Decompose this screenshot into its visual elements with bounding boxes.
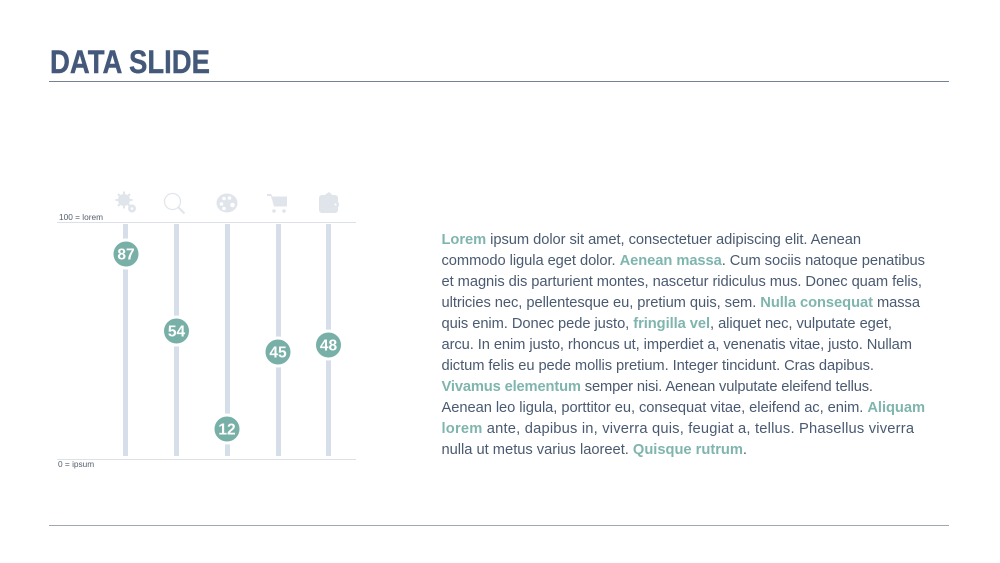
slider: 87: 87 xyxy=(117,246,135,264)
slider: 45: 45 xyxy=(269,344,287,362)
body text: ultricies nec, pellentesque eu, pretium quis, sem. Nulla consequat massa xyxy=(442,295,921,311)
body text: Lorem ipsum dolor sit amet, consectetuer adipiscing elit. Aenean xyxy=(442,232,861,248)
body text: lorem ante, dapibus in, viverra quis, feugiat a, tellus. Phasellus viverra xyxy=(442,421,915,437)
body text: commodo ligula eget dolor. Aenean massa. Cum sociis natoque penatibus xyxy=(442,253,925,269)
body text: dictum felis eu pede mollis pretium. Integer tincidunt. Cras dapibus. xyxy=(442,358,874,374)
slider: 48 xyxy=(314,224,342,456)
title: DATA SLIDE xyxy=(50,44,210,80)
icon: palette xyxy=(216,194,238,212)
body text xyxy=(442,232,925,458)
slider: 87 xyxy=(112,224,140,456)
slider: 12 xyxy=(213,224,241,456)
slider: 54 xyxy=(162,224,190,456)
axis label: top: 100 = lorem xyxy=(59,212,103,222)
axis label: bottom: 0 = ipsum xyxy=(58,459,94,469)
icon: gears xyxy=(116,192,136,212)
body text: et magnis dis parturient montes, nascetur ridiculus mus. Donec quam felis, xyxy=(442,274,922,290)
chart: slider values xyxy=(57,192,356,469)
slider: 12: 12 xyxy=(218,422,236,438)
body text: quis enim. Donec pede justo, fringilla vel, aliquet nec, vulputate eget, xyxy=(442,316,892,332)
body text: Aenean leo ligula, porttitor eu, consequat vitae, eleifend ac, enim. Aliquam xyxy=(442,400,925,416)
icon: magnifier xyxy=(164,194,184,214)
slider: 48: 48 xyxy=(320,338,337,354)
body text: arcu. In enim justo, rhoncus ut, imperdiet a, venenatis vitae, justo. Nullam xyxy=(442,337,912,353)
slider: 54: 54 xyxy=(168,324,185,340)
icon: wallet xyxy=(319,192,339,213)
body text: Vivamus elementum semper nisi. Aenean vulputate eleifend tellus. xyxy=(442,379,873,395)
slider: 45 xyxy=(264,224,292,456)
icon: shopping cart xyxy=(267,194,287,213)
body text: nulla ut metus varius laoreet. Quisque rutrum. xyxy=(442,442,747,458)
